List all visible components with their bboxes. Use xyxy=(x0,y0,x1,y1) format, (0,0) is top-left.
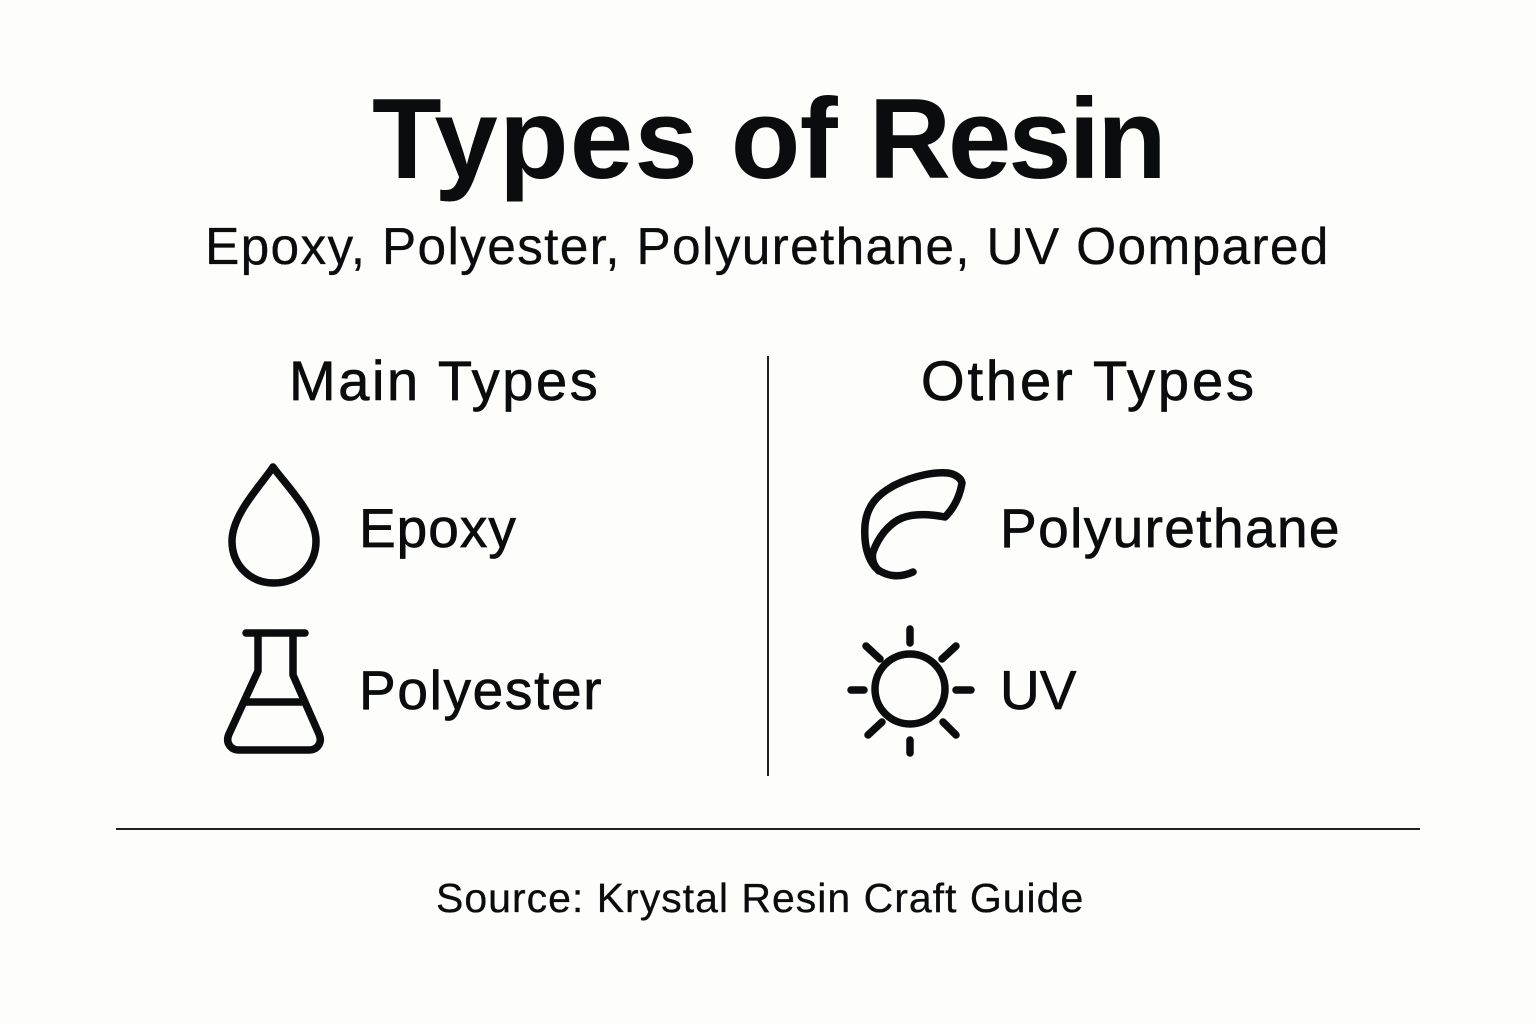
label: epoxy: Epoxy xyxy=(359,497,517,559)
source line: Source: Krystal Resin Craft Guide xyxy=(436,875,1084,921)
label: polyester: Polyester xyxy=(359,659,603,721)
title: Types of Resin xyxy=(372,76,1164,203)
heading: main types: Main Types xyxy=(289,349,600,412)
heading: other types: Other Types xyxy=(921,349,1257,412)
label: polyurethane: Polyurethane xyxy=(1000,497,1341,559)
label: uv: UV xyxy=(1000,659,1076,721)
vertical divider xyxy=(767,356,769,776)
horizontal divider xyxy=(116,828,1420,830)
subtitle: Epoxy, Polyester, Polyurethane, UV Oompared xyxy=(205,217,1330,275)
